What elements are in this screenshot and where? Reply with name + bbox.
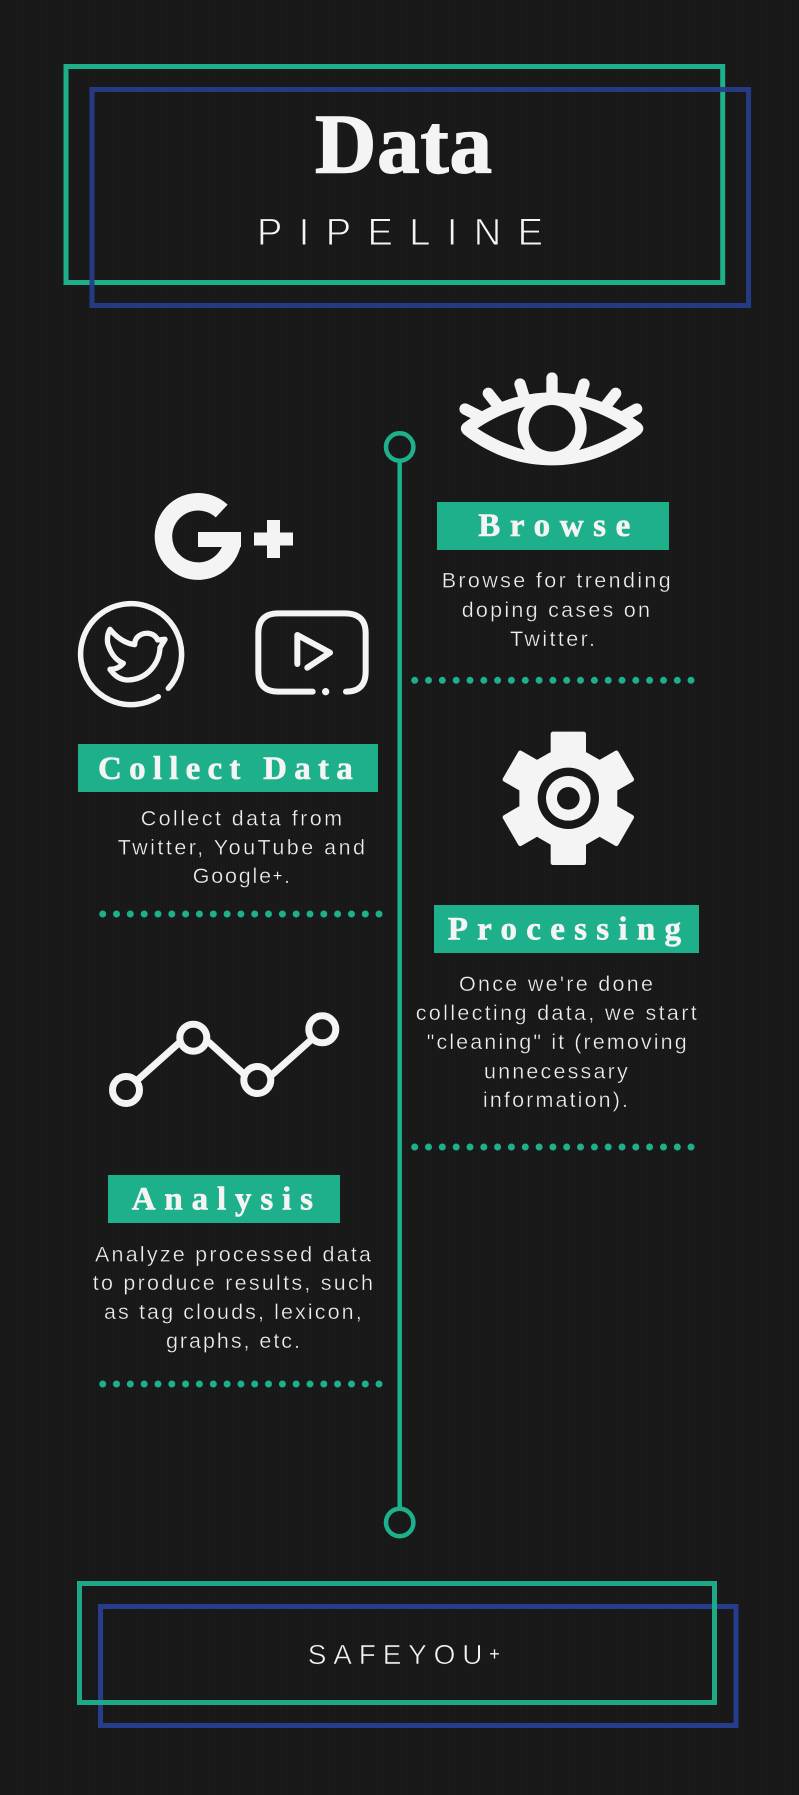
text: browse description: Browse for trending (442, 569, 671, 593)
title: Data (315, 98, 492, 192)
panel: collect data (78, 744, 382, 918)
heading: analysis (108, 1175, 340, 1223)
panel: footer (80, 1584, 736, 1726)
text: collect description: Google (193, 864, 271, 888)
heading: processing: Processing (448, 911, 682, 947)
text: analysis description: to produce results, such (93, 1271, 373, 1295)
text: processing description: information). (483, 1088, 628, 1112)
icon: line chart (112, 1016, 336, 1104)
text: processing description: collecting data, we start (416, 1001, 697, 1025)
footer frame blue (100, 1606, 736, 1726)
icon: google plus (163, 502, 293, 571)
text: processing description: "cleaning" it (removing (427, 1030, 687, 1054)
heading: analysis: Analysis (132, 1181, 313, 1217)
icon: gear (505, 734, 632, 863)
panel: header (66, 66, 748, 306)
text: collect description (118, 807, 365, 888)
heading: collect data (78, 744, 378, 792)
panel: processing (411, 905, 699, 1150)
heading: collect data: Collect Data (98, 751, 353, 787)
footer brand: + (489, 1644, 500, 1664)
text: analysis description: graphs, etc. (166, 1329, 300, 1353)
subtitle: PIPELINE (257, 212, 543, 254)
dotted divider (99, 910, 382, 918)
heading: browse (437, 502, 669, 550)
text: collect description: Collect data from (141, 807, 342, 831)
text: analysis description: Analyze processed data (95, 1242, 371, 1266)
text: collect description: . (284, 864, 290, 888)
text: analysis description (93, 1242, 373, 1353)
text: browse description (442, 569, 671, 651)
icon: youtube (258, 613, 366, 695)
panel: browse (411, 502, 694, 684)
panel: analysis (93, 1175, 382, 1388)
text: analysis description: as tag clouds, lexicon, (104, 1300, 362, 1324)
icon: eye (461, 378, 643, 465)
icon: twitter (81, 604, 182, 705)
heading: browse: Browse (478, 508, 630, 544)
dotted divider (411, 1144, 694, 1150)
timeline (386, 433, 413, 1536)
header frame blue (92, 90, 748, 306)
text: browse description: Twitter. (510, 627, 595, 651)
heading: processing (434, 905, 699, 953)
footer frame green (80, 1584, 714, 1702)
dotted divider (99, 1380, 382, 1388)
footer brand: SAFEYOU (308, 1639, 482, 1670)
text: collect description: + (273, 868, 282, 885)
text: processing description: unnecessary (484, 1059, 628, 1083)
text: processing description: Once we're done (459, 972, 653, 996)
text: processing description (416, 972, 697, 1112)
header frame green (66, 66, 723, 282)
text: browse description: doping cases on (462, 598, 650, 622)
text: collect description: Twitter, YouTube and (118, 835, 365, 859)
dotted divider (411, 677, 694, 684)
